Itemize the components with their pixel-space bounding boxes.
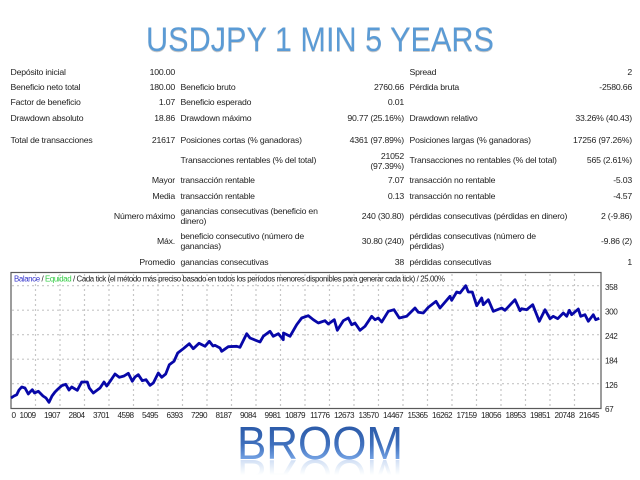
panel: statistics table [10, 67, 632, 266]
row: average trade [152, 190, 632, 200]
row: average consecutive: ganancias consecutivas [180, 256, 268, 266]
row: largest trade: transacción no rentable [410, 175, 495, 185]
row: average trade: transacción no rentable [410, 190, 495, 200]
x axis labels: 10879 [285, 411, 306, 420]
row: average consecutive: 1 [627, 256, 632, 266]
row: profit factor: 1.07 [159, 97, 175, 107]
row: maximum consecutive wins: 2 (-9.86) [601, 211, 632, 221]
row: maximum consecutive profit [157, 231, 632, 251]
x axis labels: 7290 [191, 411, 208, 420]
chart legend: Balance / Equidad / Cada tick (el método más preciso basado en todos los períodos menores disponibles para generar cada tick) / 25.00% [14, 274, 445, 284]
x axis labels: 13570 [358, 411, 379, 420]
x axis labels: 20748 [554, 411, 575, 420]
x axis labels: 15365 [407, 411, 428, 420]
row: maximum consecutive wins: dinero) [180, 216, 206, 226]
title: USDJPY 1 MIN 5 YEARS [146, 22, 494, 60]
y axis labels: 358 [605, 283, 618, 292]
row: total trades: Posiciones cortas (% ganadoras) [180, 135, 302, 145]
row: drawdown: 33.26% (40.43) [575, 112, 632, 122]
x axis labels: 4598 [117, 411, 134, 420]
row: drawdown: Drawdown relativo [410, 112, 478, 122]
row: maximum consecutive profit: beneficio consecutivo (número de [180, 231, 304, 241]
row: drawdown [10, 112, 632, 122]
row: average consecutive: Promedio [139, 256, 175, 266]
row: net and gross profit [10, 82, 632, 92]
row: profitable trades: Transacciones rentables (% del total) [180, 155, 316, 165]
row: average trade: 0.13 [388, 190, 404, 200]
row: profitable trades [180, 151, 632, 171]
row: maximum consecutive profit: pérdidas) [410, 241, 444, 251]
row: maximum consecutive wins: Número máximo [114, 211, 175, 221]
row: maximum consecutive profit: pérdidas consecutivas (número de [410, 231, 536, 241]
row: profit factor: Beneficio esperado [180, 97, 251, 107]
row: average trade: -4.57 [613, 190, 632, 200]
row: average consecutive: pérdidas consecutivas [410, 256, 491, 266]
x axis labels: 1009 [19, 411, 36, 420]
row: drawdown: 18.86 [154, 112, 175, 122]
row: largest trade: transacción rentable [180, 175, 255, 185]
row: net and gross profit: 180.00 [150, 82, 175, 92]
row: profitable trades: 21052 [381, 151, 404, 161]
row: initial deposit and spread: Spread [410, 67, 436, 77]
row: drawdown: Drawdown máximo [180, 112, 251, 122]
row: largest trade: 7.07 [388, 175, 404, 185]
x axis labels: 6393 [166, 411, 183, 420]
y axis labels [605, 283, 618, 414]
x axis labels: 9084 [240, 411, 257, 420]
row: drawdown: 90.77 (25.16%) [347, 112, 404, 122]
row: average consecutive: 38 [395, 256, 404, 266]
brand logo: BROOM: BROOM [237, 417, 403, 469]
row: net and gross profit: 2760.66 [374, 82, 404, 92]
row: initial deposit and spread [10, 67, 632, 77]
row: maximum consecutive wins: pérdidas consecutivas (pérdidas en dinero) [410, 211, 567, 221]
row: profit factor: 0.01 [388, 97, 404, 107]
row: profitable trades: Transacciones no rentables (% del total) [410, 155, 557, 165]
row: maximum consecutive profit: -9.86 (2) [601, 236, 632, 246]
row: maximum consecutive profit: ganancias) [180, 241, 221, 251]
balance line [11, 286, 599, 402]
x axis labels: 18953 [505, 411, 526, 420]
row: profitable trades: (97.39%) [370, 161, 404, 171]
row: maximum consecutive profit: 30.80 (240) [362, 236, 404, 246]
x axis labels: 12673 [334, 411, 355, 420]
x axis labels: 17159 [456, 411, 477, 420]
row: net and gross profit: Pérdida bruta [410, 82, 459, 92]
row: maximum consecutive profit: Máx. [157, 236, 175, 246]
x axis labels: 11776 [310, 411, 330, 420]
row: initial deposit and spread: 100.00 [150, 67, 175, 77]
x axis labels: 14467 [383, 411, 404, 420]
x axis labels: 16262 [432, 411, 453, 420]
row: profit factor [10, 97, 404, 107]
row: profitable trades: 565 (2.61%) [587, 155, 632, 165]
row: net and gross profit: Beneficio neto total [10, 82, 80, 92]
x axis labels: 0 [11, 411, 16, 420]
x axis labels: 18056 [481, 411, 502, 420]
y axis labels: 184 [605, 356, 618, 366]
row: total trades: 4361 (97.89%) [350, 135, 404, 145]
row: net and gross profit: Beneficio bruto [180, 82, 235, 92]
row: maximum consecutive wins: 240 (30.80) [362, 211, 404, 221]
row: maximum consecutive wins: ganancias consecutivas (beneficio en [180, 206, 318, 216]
x axis labels [11, 411, 600, 420]
y axis labels: 242 [605, 332, 618, 341]
row: largest trade [152, 175, 632, 185]
x axis labels: 9981 [264, 411, 281, 420]
row: total trades: Posiciones largas (% ganadoras) [410, 135, 531, 145]
row: total trades: Total de transacciones [10, 135, 93, 145]
row: average consecutive [139, 256, 632, 266]
row: initial deposit and spread: Depósito inicial [10, 67, 66, 77]
x axis labels: 2804 [68, 411, 85, 420]
x axis labels: 3701 [93, 411, 110, 420]
row: profit factor: Factor de beneficio [10, 97, 81, 107]
row: total trades: 17256 (97.26%) [573, 135, 632, 145]
row: largest trade: -5.03 [613, 175, 632, 185]
y axis labels: 300 [605, 308, 618, 316]
row: total trades [10, 135, 632, 145]
x axis labels: 1907 [44, 411, 61, 420]
row: net and gross profit: -2580.66 [599, 82, 632, 92]
x axis labels: 19851 [530, 411, 551, 420]
y axis labels: 67 [605, 405, 614, 414]
chart frame [11, 272, 601, 408]
x axis labels: 21645 [579, 411, 600, 420]
x axis labels: 5495 [142, 411, 159, 420]
row: largest trade: Mayor [152, 175, 175, 185]
row: maximum consecutive wins [114, 206, 632, 226]
row: average trade: Media [152, 190, 175, 200]
row: initial deposit and spread: 2 [627, 67, 632, 77]
row: total trades: 21617 [152, 135, 175, 145]
x axis labels: 8187 [215, 411, 232, 420]
y axis labels: 126 [605, 381, 618, 390]
row: drawdown: Drawdown absoluto [10, 112, 83, 122]
row: average trade: transacción rentable [180, 190, 255, 200]
title: USDJPY 1 MIN 5 YEARS [146, 21, 494, 59]
